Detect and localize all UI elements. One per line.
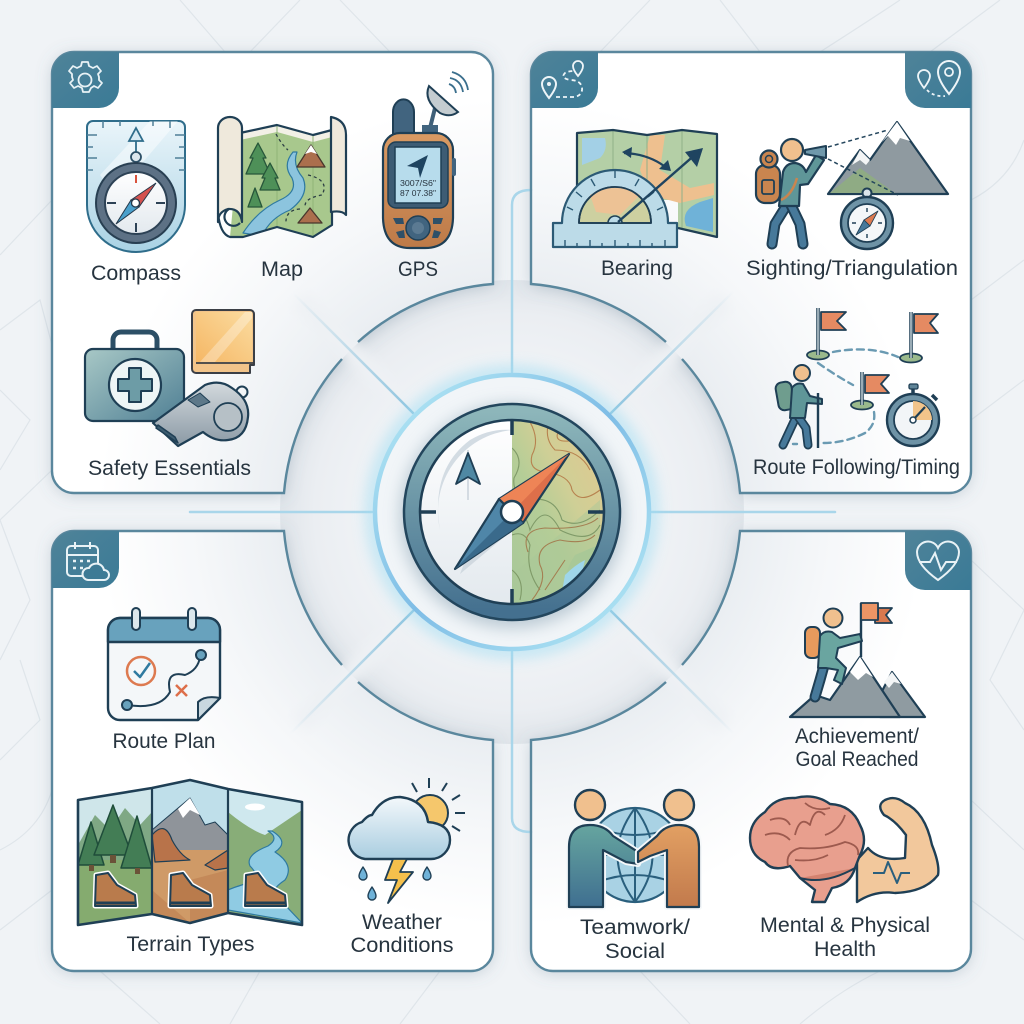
label: bearing: Bearing xyxy=(601,257,673,280)
label: achievement goal reached: Goal Reached xyxy=(796,748,918,771)
label: map: Map xyxy=(261,258,303,281)
central compass emblem xyxy=(374,374,650,650)
label: weather conditions: Conditions xyxy=(350,934,454,957)
icon: brain and bicep xyxy=(750,796,938,902)
corner tab: gear xyxy=(52,52,119,108)
corner tab: heart xyxy=(905,531,971,590)
label: weather conditions: Weather xyxy=(362,911,442,934)
icon: bearing map and protractor xyxy=(553,130,717,247)
connector lines xyxy=(190,190,835,832)
corner tab: pins xyxy=(905,52,971,108)
central circular backdrop xyxy=(280,280,744,744)
icon: weather xyxy=(349,778,465,903)
icon: achievement hiker on summit xyxy=(790,603,925,717)
icon: route plan calendar xyxy=(108,608,220,720)
icon: GPS device xyxy=(383,72,468,248)
label: teamwork social: Social xyxy=(605,940,665,963)
icon: map xyxy=(218,117,346,237)
light diagonal corridors xyxy=(300,300,724,724)
label: route plan: Route Plan xyxy=(112,730,216,753)
corner tab: route xyxy=(531,52,598,108)
label: route following/timing: Route Following/Timing xyxy=(753,456,960,479)
label: GPS: GPS xyxy=(398,258,438,281)
icon: compass baseplate xyxy=(87,121,185,252)
corner tab: calendar xyxy=(52,531,119,590)
label: terrain types: Terrain Types xyxy=(126,933,254,956)
label: mental and physical health: Mental & Physical xyxy=(760,914,930,937)
label: teamwork social: Teamwork/ xyxy=(580,916,690,939)
label: compass: Compass xyxy=(91,262,181,285)
icon: GPS device: 87 07.38" xyxy=(400,189,436,198)
label: achievement goal reached: Achievement/ xyxy=(795,725,919,748)
icon: GPS device: 3007/S6" xyxy=(400,179,436,188)
icon: sighting mountain and hiker xyxy=(756,122,948,249)
small north arrow xyxy=(467,450,469,500)
compass bezel xyxy=(412,412,612,612)
icon: teamwork globe xyxy=(569,790,699,907)
icon: terrain triptych xyxy=(78,780,302,930)
icon: route following xyxy=(775,308,939,448)
label: mental and physical health: Health xyxy=(814,938,876,961)
icon: safety essentials xyxy=(85,310,254,446)
needle xyxy=(460,532,510,574)
label: safety essentials: Safety Essentials xyxy=(88,457,251,480)
label: sighting/triangulation: Sighting/Triangulation xyxy=(746,257,958,280)
